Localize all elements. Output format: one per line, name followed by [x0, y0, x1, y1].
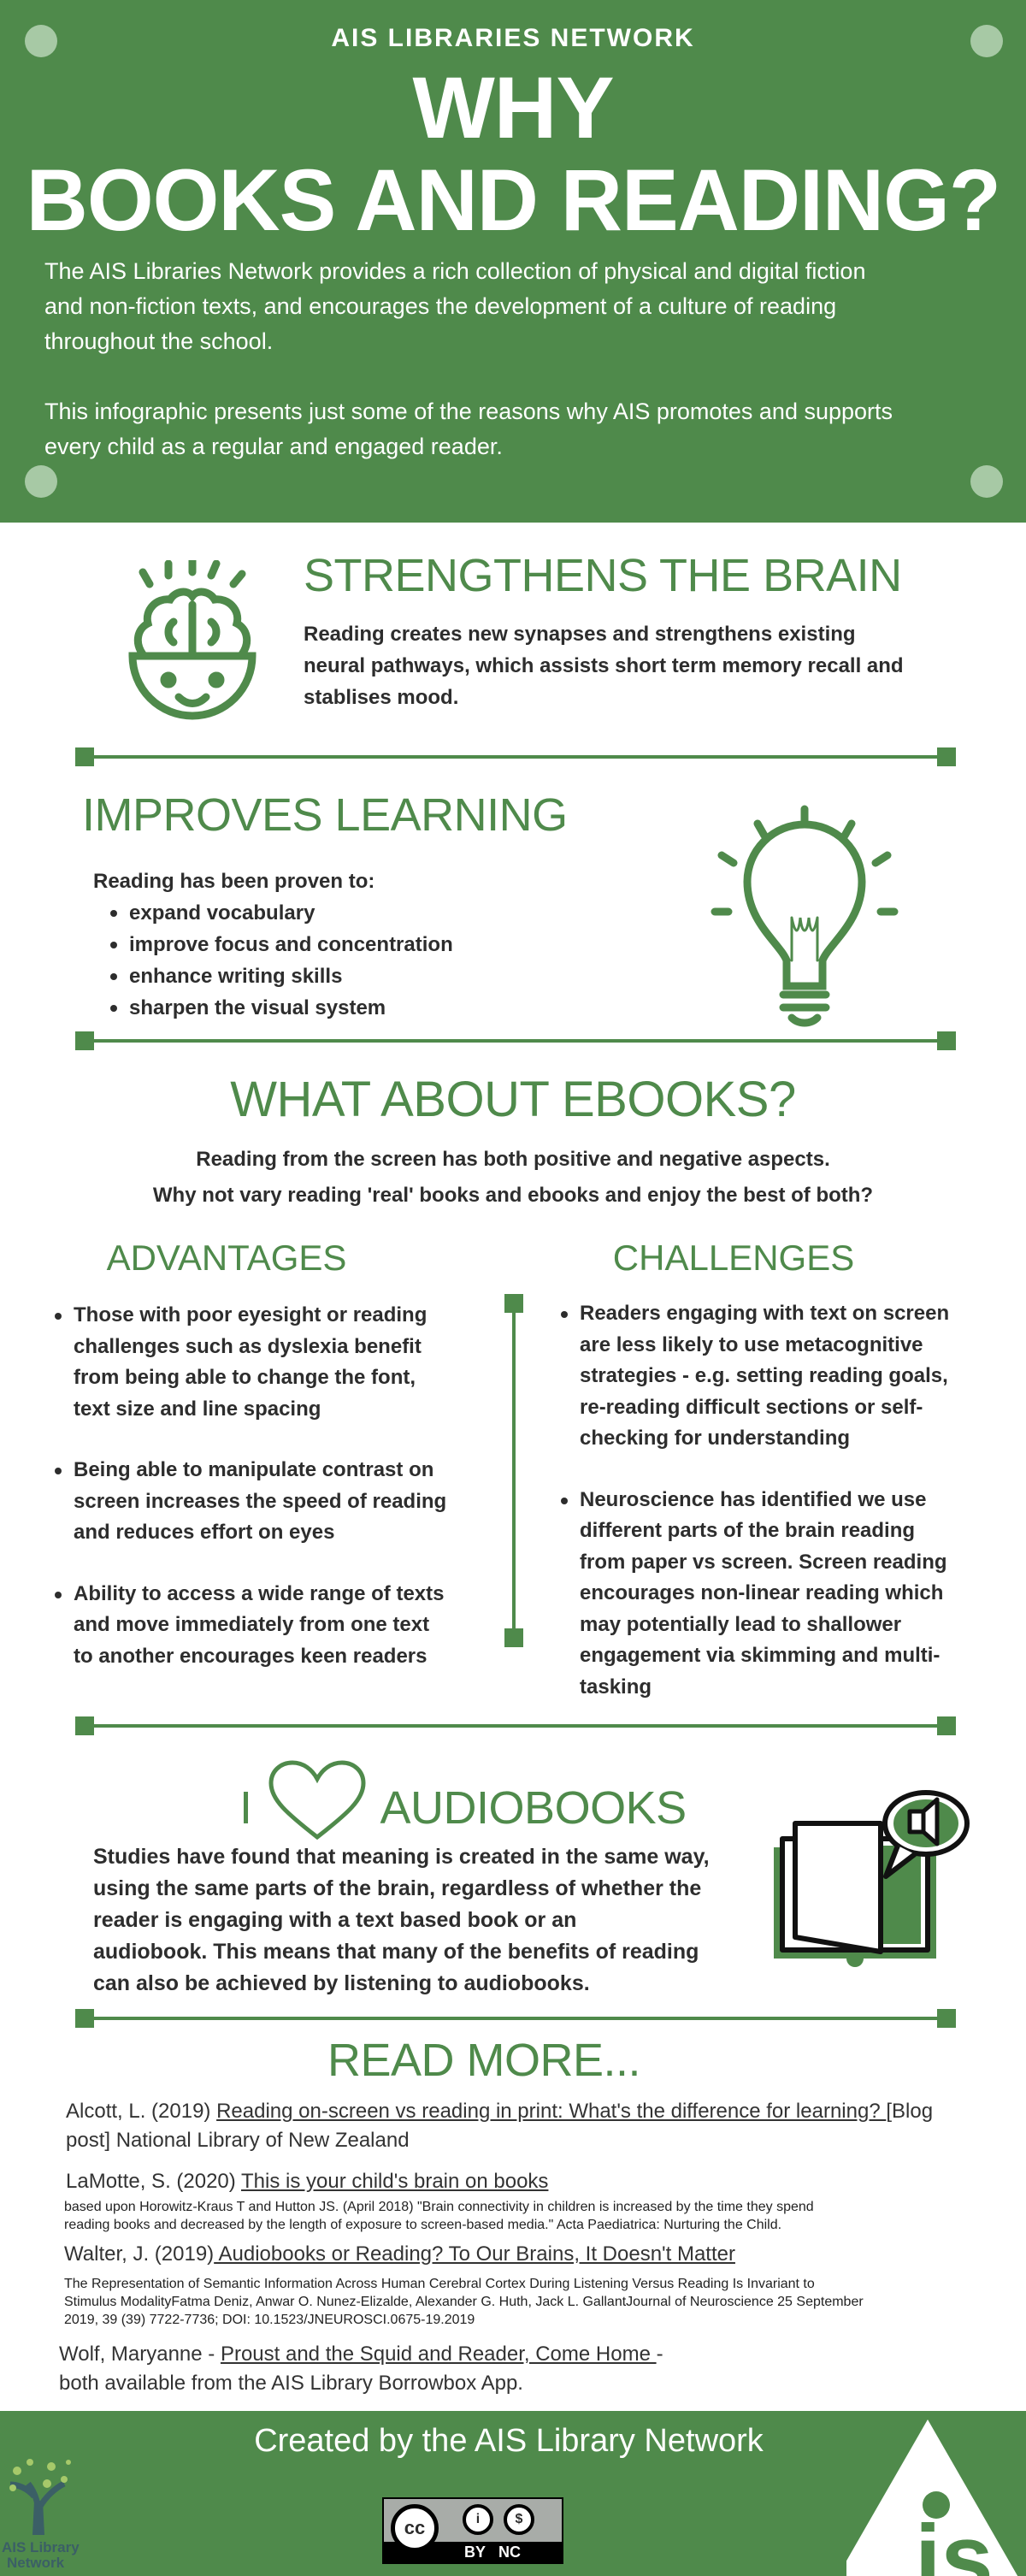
ref: Walter note — [64, 2277, 864, 2327]
logo: AIS triangle — [846, 2419, 1017, 2576]
text: ebooks intro: Why not vary reading 'real' books and ebooks and enjoy the best of both? — [153, 1184, 873, 1207]
badge: creative commons BY NC: $ — [516, 2512, 522, 2526]
text: brain — [304, 623, 904, 709]
ref: Alcott — [66, 2100, 933, 2152]
list: advantages: Ability to access a wide range of texts — [74, 1582, 444, 1604]
title — [26, 59, 1000, 249]
ref: Walter note: 2019, 39 (39) 7722-7736; DOI: 10.1523/JNEUROSCI.0675-19.2019 — [64, 2313, 475, 2327]
ref: Alcott: post] National Library of New Zealand — [66, 2129, 410, 2152]
list: challenges: strategies - e.g. setting reading goals, — [580, 1364, 948, 1387]
list: challenges: are less likely to use metacognitive — [580, 1332, 923, 1356]
list: challenges: checking for understanding — [580, 1427, 850, 1450]
list: challenges: encourages non-linear reading which — [580, 1581, 943, 1604]
text: ebooks intro: Reading from the screen has both positive and negative aspects. — [196, 1148, 830, 1171]
list: learning benefits: expand vocabulary — [129, 901, 315, 925]
heading: read more: READ MORE... — [327, 2035, 640, 2086]
heading: what about ebooks: WHAT ABOUT EBOOKS? — [230, 1072, 796, 1127]
icon: light bulb — [711, 806, 898, 1026]
badge: creative commons BY NC: i — [476, 2512, 480, 2526]
ref: Wolf — [59, 2343, 663, 2395]
text: audiobooks: can also be achieved by listening to audiobooks. — [93, 1971, 590, 1995]
logo: tree: AIS Library — [2, 2539, 80, 2555]
icon: brain head — [128, 560, 256, 720]
intro text: and non-fiction texts, and encourages the development of a culture of reading — [44, 293, 836, 319]
logo: tree: Network — [7, 2555, 65, 2571]
list: advantages: and move immediately from one text — [74, 1613, 429, 1636]
ref: Walter note: The Representation of Semantic Information Across Human Cerebral Cortex During Listening Versus Reading Is Invariant to — [64, 2277, 815, 2291]
heading: strengthens the brain: STRENGTHENS THE BRAIN — [304, 550, 902, 601]
icon: audiobook — [774, 1790, 970, 1967]
list: advantages: Being able to manipulate contrast on — [74, 1458, 433, 1481]
text: brain: stablises mood. — [304, 686, 458, 709]
ref: LaMotte: LaMotte, S. (2020) This is your child's brain on books — [66, 2170, 548, 2193]
intro text: The AIS Libraries Network provides a rich collection of physical and digital fiction — [44, 258, 865, 284]
heading: improves learning: IMPROVES LEARNING — [82, 789, 568, 841]
badge: creative commons BY NC — [382, 2497, 563, 2564]
ref: Alcott: Alcott, L. (2019) Reading on-screen vs reading in print: What's the difference for learning? [Blog — [66, 2100, 933, 2123]
list: learning benefits: Reading has been proven to: — [93, 870, 374, 893]
list: learning benefits: enhance writing skills — [129, 965, 342, 988]
intro text: This infographic presents just some of the reasons why AIS promotes and supports — [44, 399, 893, 424]
logo: tree — [2, 2459, 80, 2571]
text: ebooks intro — [152, 1148, 873, 1207]
list: advantages: to another encourages keen readers — [74, 1644, 427, 1668]
ref: Wolf: both available from the AIS Library Borrowbox App. — [59, 2372, 523, 2395]
list: advantages — [55, 1303, 446, 1668]
footer text: Created by the AIS Library Network — [254, 2423, 764, 2459]
intro text — [44, 258, 893, 459]
list: challenges: may potentially lead to shallower — [580, 1613, 901, 1635]
badge: creative commons BY NC: cc — [404, 2517, 425, 2538]
subtitle: AIS LIBRARIES NETWORK — [331, 24, 695, 52]
header panel — [0, 0, 1026, 523]
text: brain: neural pathways, which assists short term memory recall and — [304, 654, 904, 677]
list: challenges: engagement via skimming and multi- — [580, 1644, 940, 1667]
title: WHY — [413, 59, 613, 157]
title: BOOKS AND READING? — [26, 151, 1000, 249]
list: challenges: Neuroscience has identified we use — [580, 1488, 926, 1510]
text: audiobooks — [93, 1845, 710, 1995]
decorative corner dots — [25, 25, 1003, 498]
list: advantages: Those with poor eyesight or reading — [74, 1303, 427, 1326]
list: learning benefits: improve focus and concentration — [129, 933, 453, 956]
list: learning benefits: sharpen the visual system — [129, 996, 386, 1019]
text: audiobooks: Studies have found that meaning is created in the same way, — [93, 1845, 710, 1869]
footer panel — [0, 2411, 1026, 2576]
ref: LaMotte note: reading books and decreased by the length of exposure to screen-based media." Acta Paediatrica: Nurturing the Child. — [64, 2218, 781, 2232]
ref: LaMotte note — [64, 2200, 814, 2232]
list: challenges: Readers engaging with text on screen — [580, 1302, 949, 1325]
heading: advantages: ADVANTAGES — [107, 1238, 346, 1278]
references — [59, 2100, 933, 2395]
intro text: every child as a regular and engaged reader. — [44, 434, 503, 459]
heading: I love audiobooks: I AUDIOBOOKS — [239, 1782, 687, 1834]
intro text: throughout the school. — [44, 328, 273, 354]
ref: Walter: Walter, J. (2019) Audiobooks or Reading? To Our Brains, It Doesn't Matter — [64, 2242, 735, 2266]
ref: LaMotte note: based upon Horowitz-Kraus T and Hutton JS. (April 2018) "Brain connectivity in children is increased by the time they spend — [64, 2200, 814, 2214]
list: advantages: screen increases the speed of reading — [74, 1490, 446, 1512]
text: audiobooks: using the same parts of the brain, regardless of whether the — [93, 1876, 701, 1900]
list: challenges: different parts of the brain reading — [580, 1519, 915, 1542]
text: audiobooks: audiobook. This means that many of the benefits of reading — [93, 1940, 699, 1964]
ref: Walter note: Stimulus ModalityFatma Deniz, Anwar O. Nunez-Elizalde, Alexander G. Huth, Jack L. GallantJournal of Neuroscience 25 September — [64, 2295, 864, 2309]
list: challenges: from paper vs screen. Screen reading — [580, 1550, 947, 1574]
list: challenges — [561, 1302, 949, 1699]
list: advantages: challenges such as dyslexia benefit — [74, 1334, 422, 1358]
badge: creative commons BY NC: BY NC — [464, 2544, 521, 2561]
list: advantages: text size and line spacing — [74, 1397, 321, 1420]
list: challenges: re-reading difficult sections or self- — [580, 1396, 923, 1418]
heading: I love audiobooks — [239, 1760, 687, 1840]
list: advantages: and reduces effort on eyes — [74, 1521, 334, 1544]
ref: Wolf: Wolf, Maryanne - Proust and the Squid and Reader, Come Home - — [59, 2343, 663, 2366]
text: audiobooks: reader is engaging with a text based book or an — [93, 1908, 576, 1932]
list: advantages: from being able to change the font, — [74, 1366, 416, 1389]
list: learning benefits — [93, 870, 453, 1019]
heading: challenges: CHALLENGES — [613, 1238, 854, 1278]
list: challenges: tasking — [580, 1675, 652, 1699]
divider vertical — [512, 1296, 516, 1645]
text: brain: Reading creates new synapses and strengthens existing — [304, 623, 856, 646]
